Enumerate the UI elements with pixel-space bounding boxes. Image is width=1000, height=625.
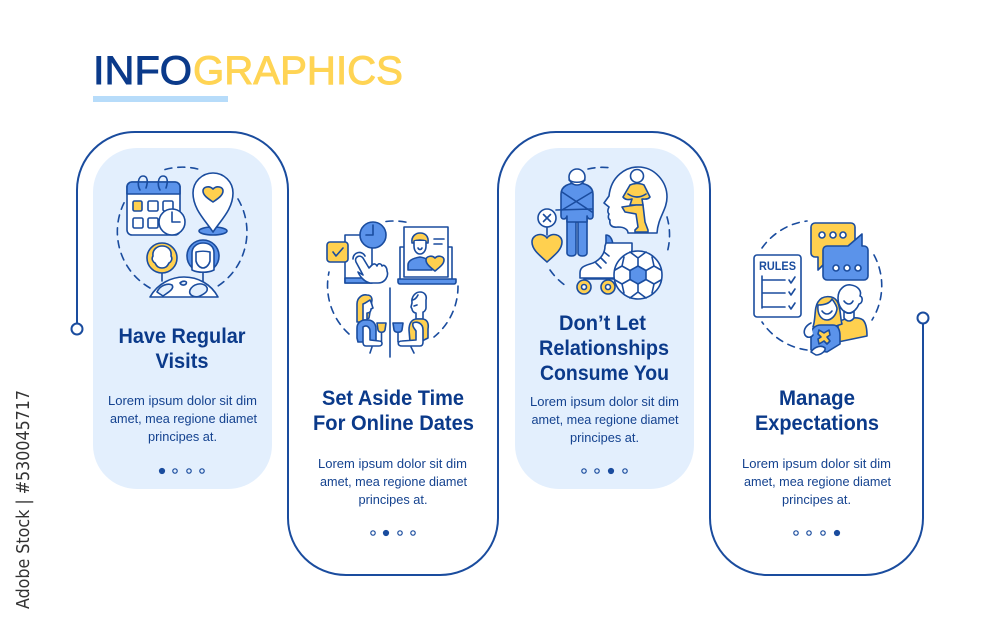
text block: Lorem ipsum dolor sit dim bbox=[530, 394, 679, 409]
man bbox=[838, 285, 867, 342]
pagination dots bbox=[794, 530, 840, 536]
heading: set aside time for online dates: For Online Dates bbox=[313, 412, 474, 435]
heading: manage expectations: Manage bbox=[779, 387, 855, 410]
pagination dots bbox=[582, 468, 627, 474]
text block: principes at. bbox=[358, 492, 428, 507]
text block bbox=[108, 393, 257, 444]
panel: have regular visits bbox=[93, 148, 272, 489]
heading: don't let relationships consume you bbox=[539, 312, 669, 385]
pagination dots bbox=[160, 468, 204, 474]
heading: have regular visits: Visits bbox=[156, 350, 208, 373]
text block: amet, mea regione diamet bbox=[744, 474, 891, 489]
title: INFOGRAPHICS bbox=[93, 49, 403, 102]
stock id caption: Adobe Stock | #530045717 bbox=[13, 390, 34, 609]
woman bbox=[804, 297, 842, 355]
heading: don't let relationships consume you: Don’t Let bbox=[559, 312, 646, 335]
heading: have regular visits: Have Regular bbox=[118, 325, 246, 348]
text block: principes at. bbox=[782, 492, 851, 507]
icon: calendar, pin, faces and globe bbox=[117, 167, 247, 297]
woman at dinner bbox=[357, 295, 386, 353]
heading: set aside time for online dates: Set Aside Time bbox=[322, 387, 464, 410]
panel: manage expectations bbox=[742, 221, 891, 536]
text block: amet, mea regione diamet bbox=[532, 412, 679, 427]
text block bbox=[742, 456, 891, 507]
connecting outline frame bbox=[72, 132, 928, 575]
panel: set aside time for online dates bbox=[313, 221, 474, 536]
icon: online date and dinner bbox=[327, 221, 458, 357]
pagination dots bbox=[371, 530, 415, 536]
title: INFOGRAPHICS: INFO bbox=[93, 49, 192, 93]
icon: rules, chat bubbles and couple: RULES bbox=[759, 261, 796, 273]
text block bbox=[530, 394, 679, 445]
heading: manage expectations bbox=[755, 387, 879, 435]
heading: manage expectations: Expectations bbox=[755, 412, 879, 435]
icon: rules, chat bubbles and couple bbox=[754, 221, 882, 355]
text block: Lorem ipsum dolor sit dim bbox=[108, 393, 257, 408]
text block: Lorem ipsum dolor sit dim bbox=[318, 456, 467, 471]
title: INFOGRAPHICS: GRAPHICS bbox=[193, 49, 403, 93]
icon: bound man, mind, skate and ball bbox=[532, 167, 670, 299]
text block: amet, mea regione diamet bbox=[110, 411, 257, 426]
text block: Lorem ipsum dolor sit dim bbox=[742, 456, 891, 471]
panel: don't let relationships consume you bbox=[515, 148, 694, 489]
text block: principes at. bbox=[148, 429, 217, 444]
text block: principes at. bbox=[570, 430, 639, 445]
heading: set aside time for online dates bbox=[313, 387, 474, 435]
man at dinner bbox=[393, 292, 428, 353]
text block bbox=[318, 456, 467, 507]
heading: have regular visits bbox=[118, 325, 246, 373]
text block: amet, mea regione diamet bbox=[320, 474, 467, 489]
heading: don't let relationships consume you: Consume You bbox=[540, 362, 669, 385]
heading: don't let relationships consume you: Relationships bbox=[539, 337, 669, 360]
